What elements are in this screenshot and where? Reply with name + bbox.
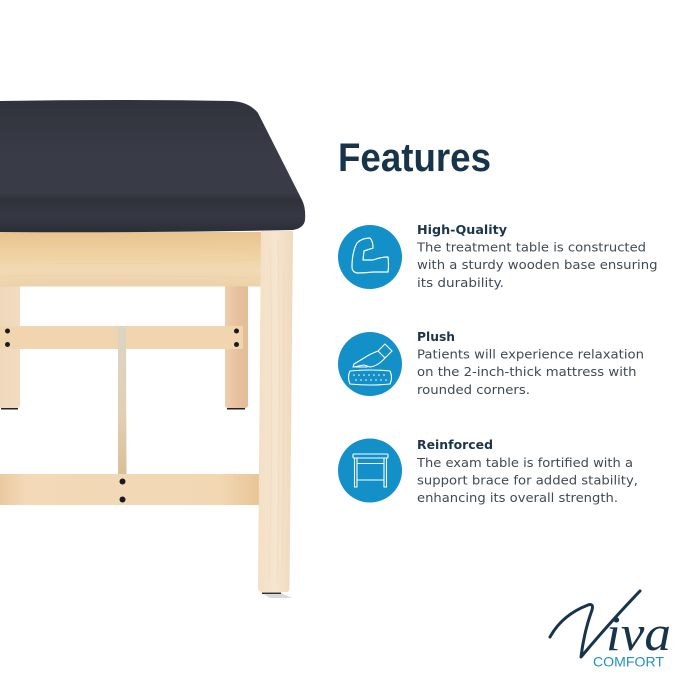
description	[416, 456, 638, 506]
description: The exam table is fortified with a	[416, 456, 633, 471]
table photo	[0, 100, 305, 598]
icon: flexed arm	[338, 225, 402, 289]
description: support brace for added stability,	[417, 474, 638, 488]
feature: plush	[338, 330, 644, 398]
description: on the 2-inch-thick mattress with	[417, 365, 636, 380]
title: Features	[338, 136, 491, 180]
back left leg	[0, 286, 20, 408]
description: its durability.	[417, 276, 504, 291]
apron	[0, 232, 261, 286]
heading: Reinforced	[417, 438, 493, 453]
logo wordmark: iva	[606, 605, 671, 661]
bolts	[5, 328, 239, 502]
description: rounded corners.	[417, 383, 530, 398]
lower brace	[0, 474, 259, 505]
mattress	[0, 100, 305, 232]
heading: High-Quality	[417, 223, 508, 238]
icon: table	[338, 438, 402, 502]
description: enhancing its overall strength.	[417, 491, 618, 506]
support strap	[118, 326, 126, 474]
logo: Viva Comfort	[550, 591, 671, 670]
description	[416, 240, 658, 291]
back right leg	[225, 286, 248, 408]
feature: reinforced	[338, 438, 638, 506]
description: Patients will experience relaxation	[417, 348, 644, 362]
upper brace	[0, 326, 243, 349]
description	[417, 348, 644, 398]
heading: Plush	[417, 330, 455, 345]
description: with a sturdy wooden base ensuring	[417, 258, 658, 273]
wood grain	[0, 240, 284, 585]
logo subline: COMFORT	[593, 654, 664, 670]
logo swash	[550, 591, 640, 657]
description: The treatment table is constructed	[416, 240, 646, 256]
front leg	[258, 231, 293, 592]
icon: hand on mattress	[338, 332, 402, 396]
feature: high-quality	[338, 223, 658, 291]
foot shadow	[262, 593, 292, 598]
